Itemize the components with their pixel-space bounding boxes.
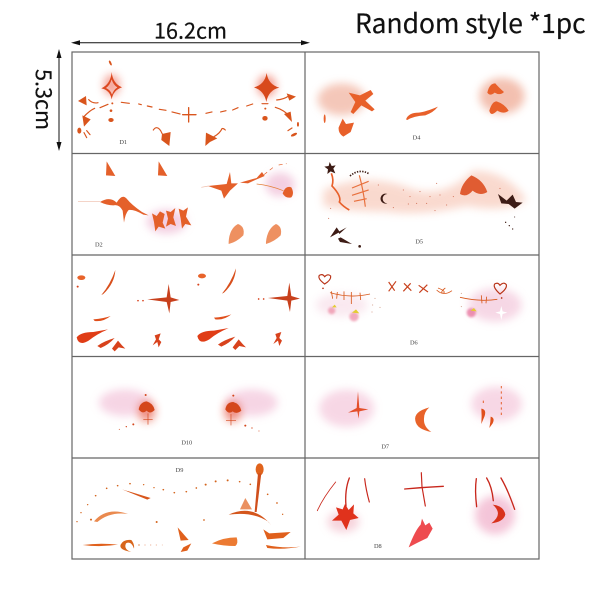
panel: sticker set with crosses (row 3) (77, 268, 300, 351)
width dimension: 16.2cm: 16.2cm (154, 14, 227, 46)
panel: D5: D5 (415, 239, 423, 246)
panel: D1 (77, 60, 299, 146)
panel: D9: D9 (176, 467, 183, 474)
panel: D10 (99, 389, 278, 447)
panel: D2: D2 (95, 241, 103, 248)
title: Random style *1pc (355, 2, 586, 41)
panel: D10: D10 (181, 440, 192, 447)
height dimension: 5.3cm (29, 49, 62, 151)
panel: D8 (317, 473, 515, 550)
panel: D9 (76, 463, 301, 552)
panel: D6: D6 (410, 340, 418, 347)
panel: D7 (319, 386, 522, 451)
panel: D6 (316, 275, 522, 347)
panel: D4: D4 (413, 135, 421, 142)
panel: D1: D1 (119, 139, 127, 146)
panel: D7: D7 (381, 444, 389, 451)
product grid frame (72, 52, 539, 559)
width dimension: 16.2cm (71, 14, 310, 46)
panel: D8: D8 (374, 543, 382, 550)
height dimension: 5.3cm: 5.3cm (29, 69, 60, 130)
panel: D4 (318, 78, 525, 142)
panel: D2 (78, 161, 295, 248)
panel: D5 (323, 162, 527, 248)
